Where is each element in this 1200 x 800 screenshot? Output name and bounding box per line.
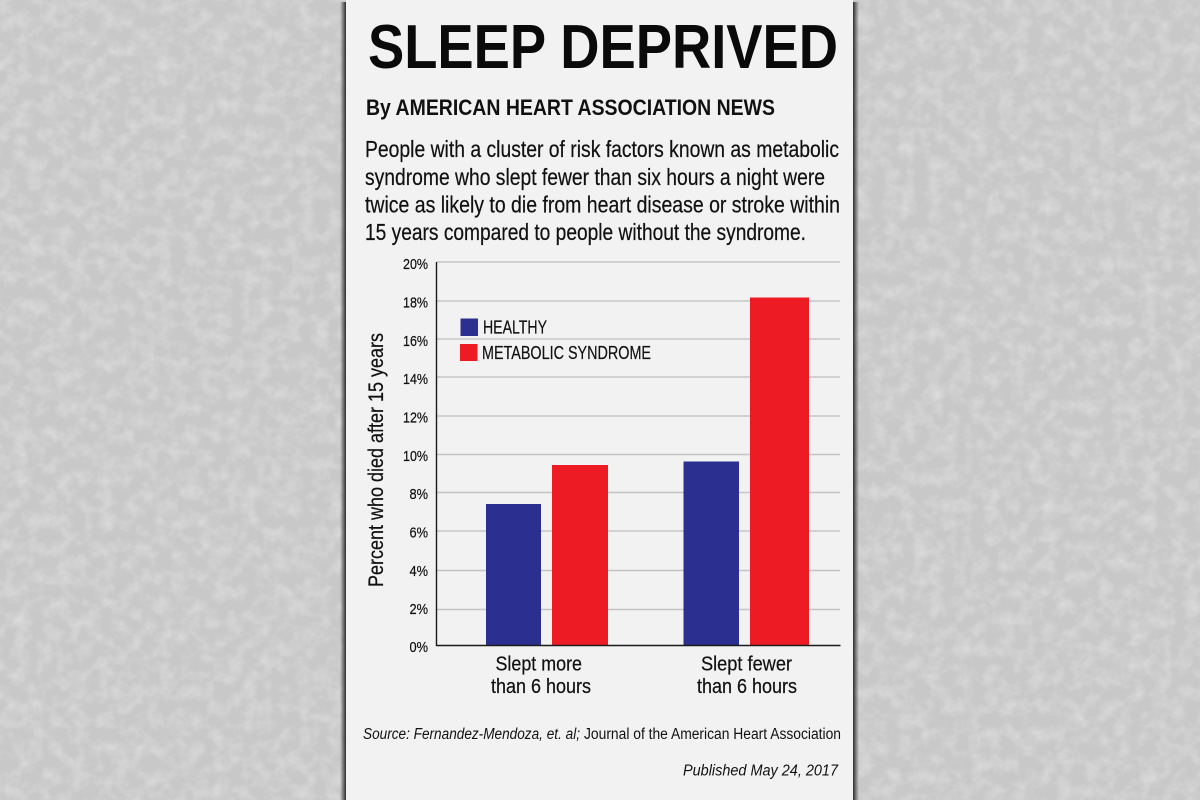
y-axis tick labels: 6% [410,524,428,542]
y-axis tick labels: 12% [403,410,428,426]
legend: METABOLIC SYNDROME [482,342,651,363]
y-axis tick labels: 18% [403,294,428,312]
bar chart [365,256,840,698]
axes [436,262,840,646]
bars: slept fewer than 6 hours [684,298,809,645]
byline: By AMERICAN HEART ASSOCIATION NEWS [366,95,775,120]
x-axis label: slept fewer: Slept fewer [701,652,792,676]
y-axis tick labels: 2% [410,601,428,618]
source line [363,726,841,743]
legend [460,316,651,363]
source line: Source: Fernandez-Mendoza, et. al; [363,726,580,743]
text block: introduction: twice as likely to die from heart disease or stroke within [365,192,840,218]
title: SLEEP DEPRIVED [368,13,838,82]
bars: slept more than 6 hours [486,465,608,645]
y-axis tick labels [403,256,428,656]
y-axis tick labels: 14% [403,371,428,388]
publication date: Published May 24, 2017 [683,762,839,780]
y-axis title: Percent who died after 15 years [365,333,388,587]
legend: HEALTHY [483,316,547,338]
y-axis tick labels: 16% [403,333,428,350]
text block: introduction [365,136,840,245]
x-axis label: slept fewer [697,652,797,698]
text block: introduction: syndrome who slept fewer than six hours a night were [365,164,825,190]
y-axis tick labels: 20% [403,256,428,273]
x-axis label: slept fewer: than 6 hours [697,675,797,698]
y-axis tick labels: 8% [410,486,428,503]
y-axis tick labels: 4% [410,563,428,580]
text block: introduction: People with a cluster of risk factors known as metabolic [365,136,839,162]
x-axis label: slept more: than 6 hours [491,675,591,698]
x-axis label: slept more [491,652,591,698]
x-axis label: slept more: Slept more [496,652,582,676]
source line: Journal of the American Heart Association [584,726,841,743]
y-axis tick labels: 0% [410,639,428,656]
panel shadow [340,2,859,800]
y-axis tick labels: 10% [403,448,428,465]
panel: article card [346,0,853,800]
text block: introduction: 15 years compared to people without the syndrome. [365,219,806,245]
